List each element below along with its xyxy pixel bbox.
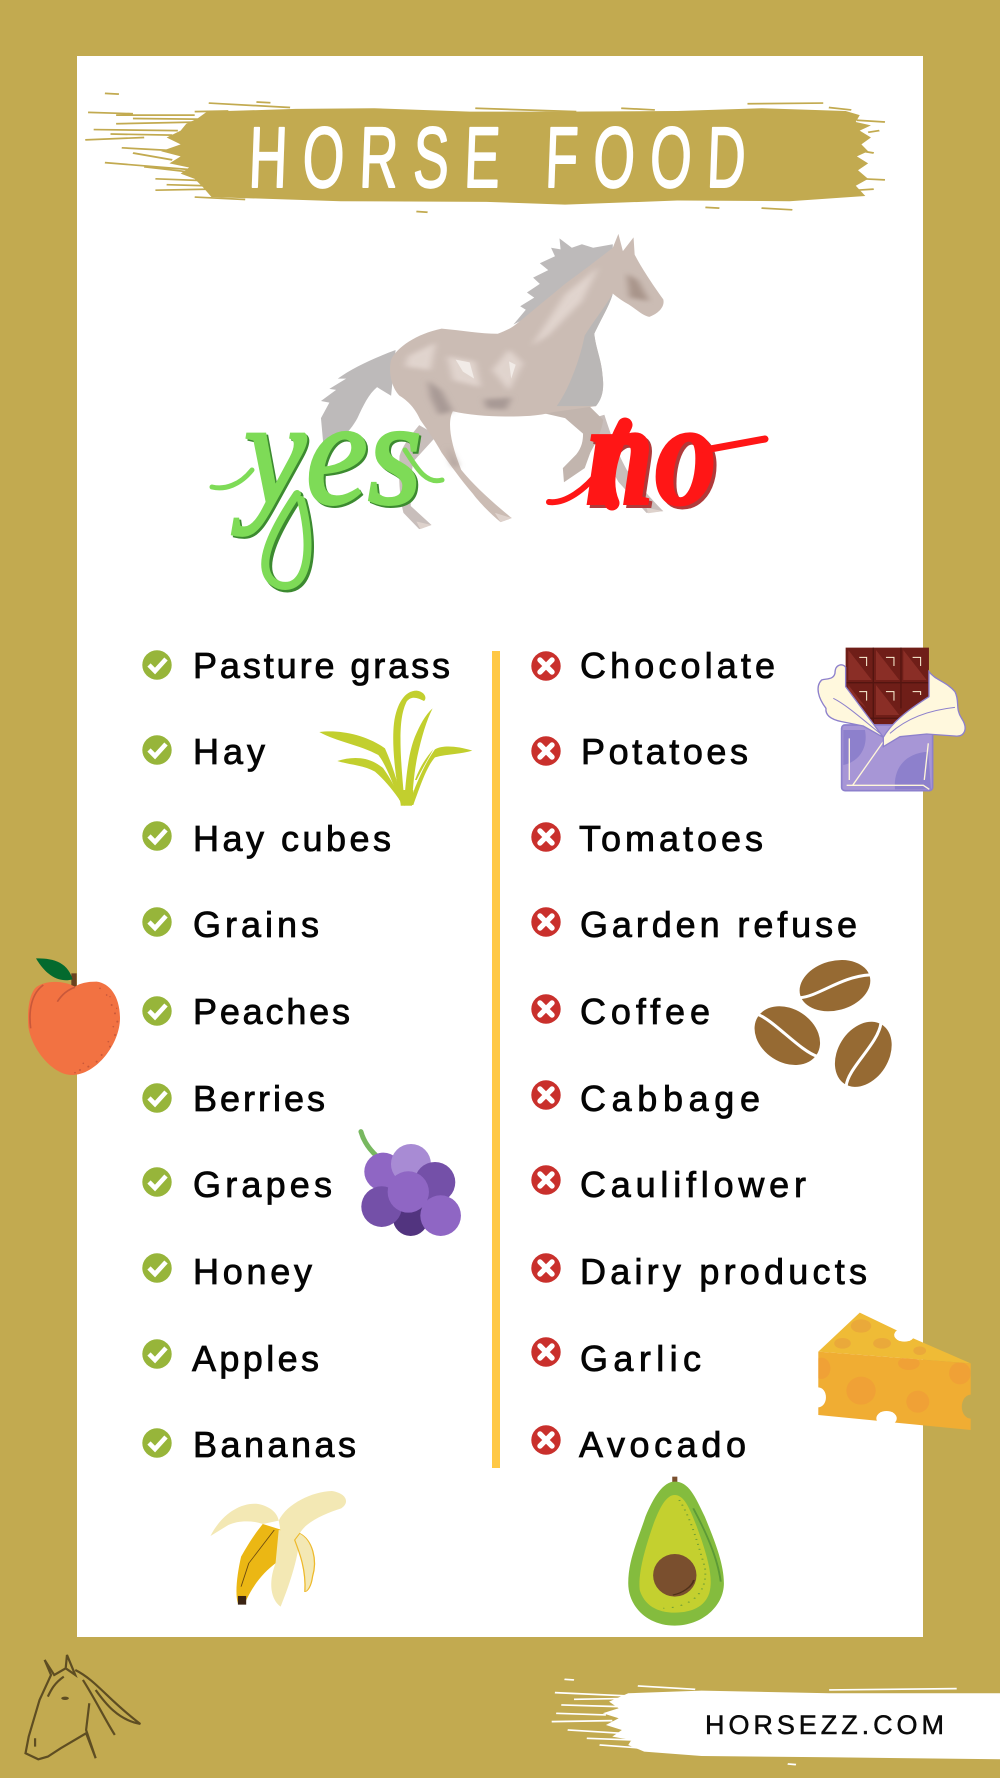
yes flourishes [212, 450, 442, 588]
no list [531, 645, 867, 1465]
item: Apples: Apples [192, 1338, 319, 1379]
footer brush and site name [552, 1679, 1000, 1765]
footer brush [552, 1679, 1000, 1765]
panel: white card [77, 56, 923, 1637]
item: Pasture grass: Pasture grass [193, 645, 450, 686]
item: Cauliflower: Cauliflower [580, 1164, 806, 1205]
wrapper [842, 725, 933, 791]
body [390, 234, 664, 522]
divider [492, 651, 500, 1468]
item: Tomatoes: Tomatoes [579, 818, 763, 859]
no flourishes [549, 425, 765, 503]
item: Peaches: Peaches [193, 991, 350, 1032]
bean top [793, 952, 877, 1019]
tail [321, 350, 396, 449]
item: Garden refuse: Garden refuse [580, 904, 857, 945]
item: Chocolate: Chocolate [580, 645, 775, 686]
icon: coffee beans [742, 952, 904, 1098]
mane [513, 238, 613, 324]
item: Hay: Hay [193, 731, 265, 772]
item: Coffee: Coffee [580, 991, 710, 1032]
horse illustration [321, 234, 664, 529]
item: Berries: Berries [193, 1078, 325, 1119]
icon: horse head logo [26, 1655, 140, 1759]
icon: grass [319, 691, 472, 806]
site name: HORSEZZ.COM [705, 1710, 944, 1740]
icon: banana [210, 1491, 346, 1607]
bean right [823, 1010, 904, 1098]
chest shadow [557, 294, 613, 406]
title text: HORSE FOOD [247, 110, 747, 206]
icon: avocado [628, 1477, 724, 1626]
no text: no [585, 371, 717, 537]
soft highlights [405, 267, 599, 391]
hooves [416, 508, 663, 529]
cheese spots on top [834, 1319, 926, 1355]
lettering: no [549, 371, 765, 540]
head shade [627, 274, 649, 301]
icon: cheese [811, 1313, 980, 1430]
item: Honey: Honey [193, 1251, 312, 1292]
title banner [85, 93, 885, 212]
yes list [142, 645, 450, 1465]
chocolate [846, 648, 929, 738]
item: Cabbage: Cabbage [580, 1078, 760, 1119]
shaded belly [428, 380, 512, 466]
icon: grapes [361, 1132, 461, 1236]
no shadow: no [588, 374, 720, 540]
icon: chocolate bar [818, 648, 965, 791]
icon: peach [28, 958, 120, 1075]
peach speckles [99, 987, 101, 989]
item: Avocado: Avocado [579, 1424, 746, 1465]
bean left [742, 993, 833, 1078]
lettering: yes [212, 370, 442, 588]
item: Hay cubes: Hay cubes [193, 818, 391, 859]
cheese spots on side [813, 1357, 971, 1413]
item: Grains: Grains [193, 904, 319, 945]
item: Grapes: Grapes [193, 1164, 332, 1205]
yes text: yes [232, 370, 422, 536]
far legs [399, 425, 437, 529]
item: Dairy products: Dairy products [580, 1251, 867, 1292]
brush stroke [85, 93, 885, 212]
item: Potatoes: Potatoes [581, 731, 748, 772]
item: Bananas: Bananas [193, 1424, 356, 1465]
item: Hay [142, 731, 265, 772]
item: Garlic: Garlic [580, 1338, 701, 1379]
foil [818, 665, 883, 737]
shine on flank [456, 360, 516, 379]
yes shadow: yes [234, 372, 424, 538]
